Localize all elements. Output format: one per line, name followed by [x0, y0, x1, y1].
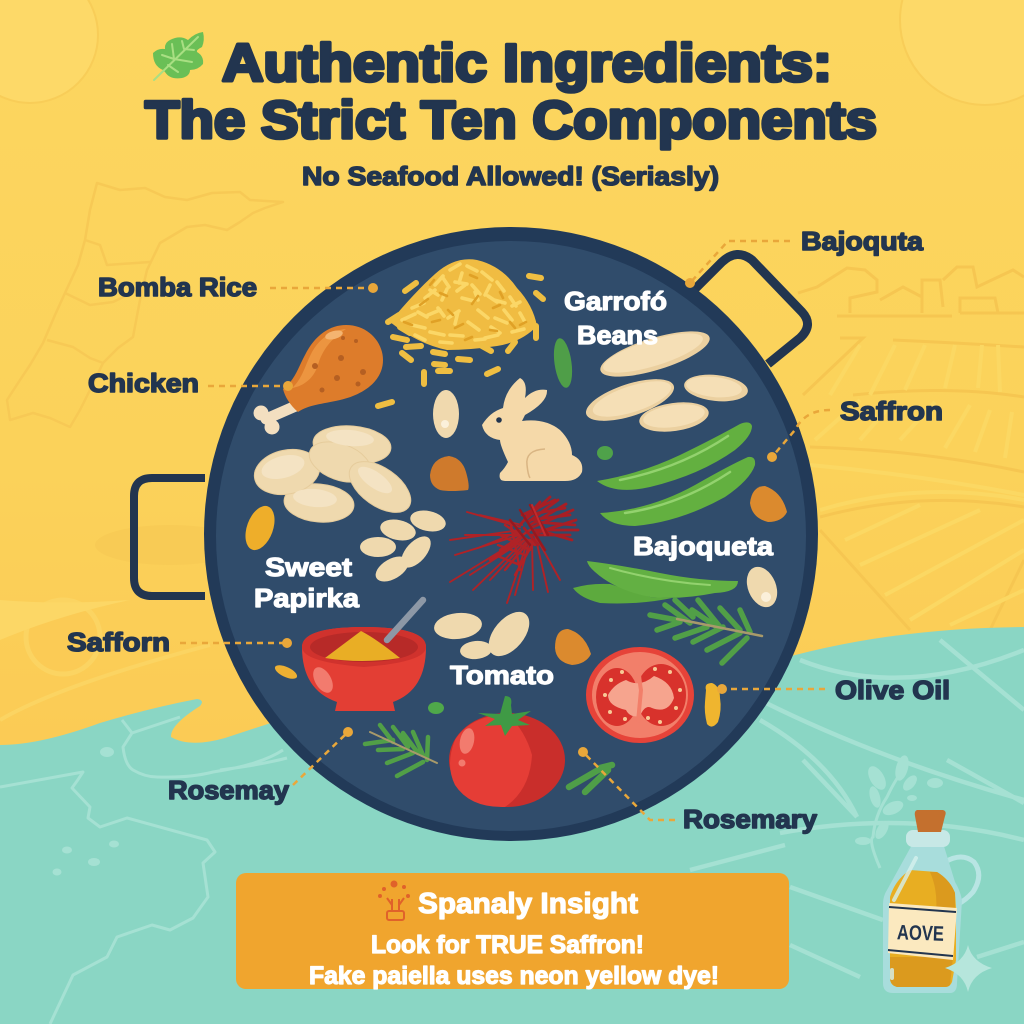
icon: rosemary sprig left: [365, 725, 437, 776]
in-pan labels: Sweet: [265, 552, 352, 582]
icon: large beans cluster: [250, 423, 420, 525]
icon: right pan handle: [694, 254, 808, 364]
in-pan labels: Bajoqueta: [633, 531, 774, 561]
icon: olive oil bottle: AOVE: [897, 921, 944, 946]
external labels: Bajoquta: [801, 226, 924, 256]
icon: plant sprig: [855, 754, 943, 868]
icon: leaf: [153, 32, 204, 80]
icon: small white beans: [360, 507, 448, 587]
icon: saffron threads: [450, 497, 578, 603]
icon: yellow grain left: [273, 662, 299, 682]
icon: sparkle: [945, 945, 992, 992]
callout: insight box: [236, 873, 789, 990]
background: teal sea: [0, 627, 1024, 1024]
icon: olive nugget: [705, 683, 721, 727]
icon: insight lamp: [379, 882, 409, 920]
paella pan: [204, 227, 818, 841]
icon: small green pod: [551, 337, 575, 389]
external labels: [67, 226, 950, 834]
in-pan labels: Tomato: [450, 660, 554, 690]
in-pan labels: Beans: [577, 320, 658, 350]
icon: brown chickpea right: [750, 486, 787, 522]
icon: brown chickpea lower: [555, 629, 591, 665]
icon: green beans upper: [597, 422, 755, 526]
title: Authentic Ingredients:: [222, 34, 832, 93]
icon: brown chickpea: [430, 456, 469, 491]
icon: bean right: [741, 562, 783, 612]
external labels: Bomba Rice: [98, 272, 257, 302]
external labels: Saffron: [840, 396, 943, 426]
external labels: Chicken: [88, 368, 199, 398]
icon: yellow bean: [240, 502, 280, 554]
icon: bomba rice: [378, 259, 543, 406]
callout: insight box: Spanaly Insight: [418, 888, 638, 920]
icon: whole tomato: [449, 696, 565, 807]
title: The Strict Ten Components: [145, 91, 877, 150]
in-pan labels: [254, 286, 774, 690]
icon: left pan handle: [134, 478, 205, 596]
icon: chicken drumstick: [254, 325, 383, 434]
external labels: Rosemary: [683, 804, 818, 834]
external labels: Olive Oil: [835, 675, 950, 705]
icon: bowl of paprika: [302, 600, 426, 711]
icon: rabbit: [482, 378, 582, 481]
icon: halved tomato: [586, 647, 694, 743]
icon: small green pea: [597, 446, 613, 460]
icon: bean trio centre: [433, 604, 537, 664]
title: [145, 34, 877, 150]
callout: insight box: Fake paiella uses neon yellow dye!: [309, 962, 719, 990]
external labels: Rosemay: [168, 775, 290, 805]
icon: green sprig lower: [569, 765, 612, 792]
subtitle: No Seafood Allowed! (Seriasly): [302, 161, 719, 191]
icon: olive oil bottle: [883, 810, 979, 993]
external labels: Safforn: [67, 627, 170, 657]
in-pan labels: Papirka: [254, 583, 360, 613]
icon: green beans lower: [573, 561, 738, 603]
callout: insight box: Look for TRUE Saffron!: [371, 931, 644, 959]
in-pan labels: Garrofó: [564, 286, 667, 316]
icon: garrofo beans: [581, 322, 749, 436]
leader lines: [180, 241, 830, 820]
icon: rosemary sprig right: [650, 600, 762, 663]
icon: small green pea lower: [428, 702, 444, 714]
icon: single white bean: [433, 390, 459, 438]
